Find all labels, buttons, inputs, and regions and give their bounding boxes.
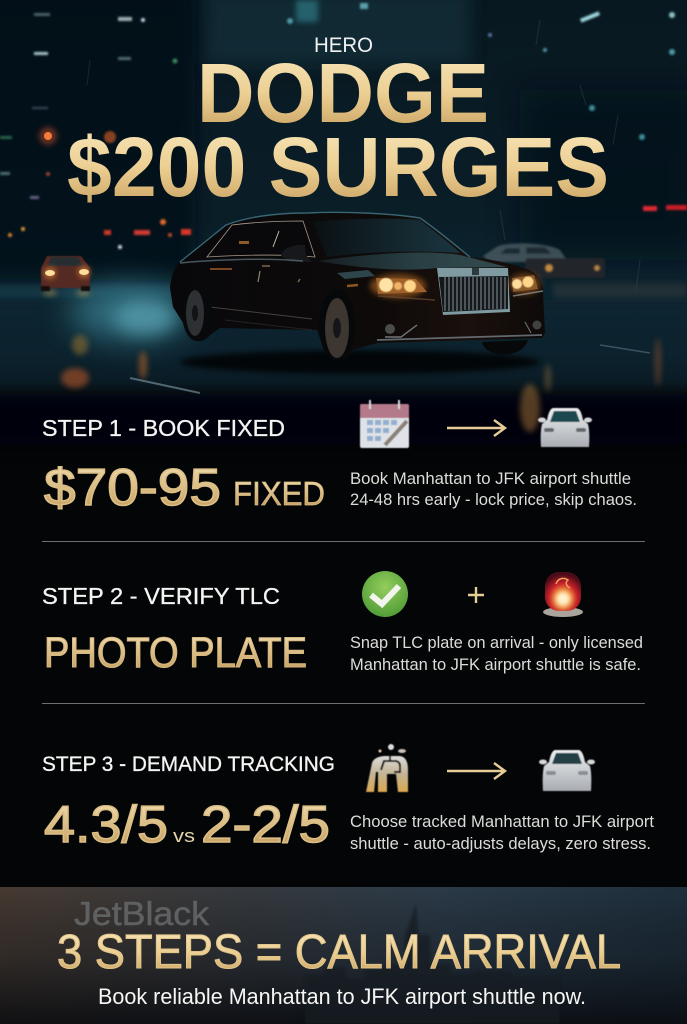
step 1 description (350, 469, 637, 509)
step 1 price: FIXED (233, 475, 325, 512)
icon: car (539, 750, 595, 791)
road reflections (43, 291, 661, 432)
icon: tracking (366, 744, 408, 792)
headlights (370, 273, 543, 300)
icon: calendar (360, 400, 409, 448)
distant cars (41, 243, 687, 298)
title: DODGE (197, 46, 489, 140)
body reflections (210, 266, 358, 330)
hood sheen (318, 253, 507, 270)
step 3 ratings: vs (173, 826, 195, 846)
title (67, 46, 609, 214)
step 3 ratings: 4.3/5 (44, 796, 168, 854)
footer headline: 3 STEPS = CALM ARRIVAL (57, 926, 621, 979)
arrow (447, 420, 505, 436)
limousine (170, 212, 545, 374)
step 3 description: Choose tracked Manhattan to JFK airport (350, 812, 654, 831)
step 3 ratings: 2-2/5 (201, 796, 330, 854)
windscreen (313, 219, 460, 257)
icon: beacon (543, 572, 583, 617)
step 1 (42, 400, 637, 517)
side windows (207, 221, 315, 257)
step 2 (42, 571, 643, 677)
step 2 highlight: PHOTO PLATE (44, 629, 307, 677)
step 3 description (350, 812, 654, 853)
road (0, 300, 687, 395)
step 3 ratings (44, 796, 330, 854)
step 2 description: Manhattan to JFK airport shuttle is safe. (350, 655, 641, 674)
step 1 description: 24-48 hrs early - lock price, skip chaos. (350, 490, 637, 509)
icon: check (362, 571, 408, 617)
brand: JetBlack (74, 895, 210, 932)
step 2 description: Snap TLC plate on arrival - only licensed (350, 633, 643, 652)
skyline silhouette (305, 905, 560, 1024)
step 1 description: Book Manhattan to JFK airport shuttle (350, 469, 631, 488)
wheels (182, 285, 528, 361)
hero scene: rainy city night (0, 0, 687, 445)
footer call to action: Book reliable Manhattan to JFK airport shuttle now. (98, 984, 586, 1009)
bumper (377, 320, 542, 340)
step 3 heading: STEP 3 - DEMAND TRACKING (42, 753, 335, 776)
title: $200 SURGES (67, 120, 609, 214)
plus (468, 587, 484, 603)
footer band (0, 887, 687, 1024)
step 3 description: shuttle - auto-adjusts delays, zero stress. (350, 834, 651, 853)
arrow (447, 763, 505, 779)
hero label: HERO (314, 34, 373, 57)
step 1 price (44, 459, 325, 517)
step 2 heading: STEP 2 - VERIFY TLC (42, 583, 280, 609)
car body (170, 212, 545, 360)
step 1 price: $70-95 (44, 459, 221, 517)
side mirror (281, 245, 312, 262)
step 2 description (350, 633, 643, 674)
icon: car (538, 408, 592, 447)
step 3 (42, 744, 654, 854)
roof highlight (180, 212, 470, 262)
grille (437, 268, 510, 315)
step 1 heading: STEP 1 - BOOK FIXED (42, 415, 285, 441)
